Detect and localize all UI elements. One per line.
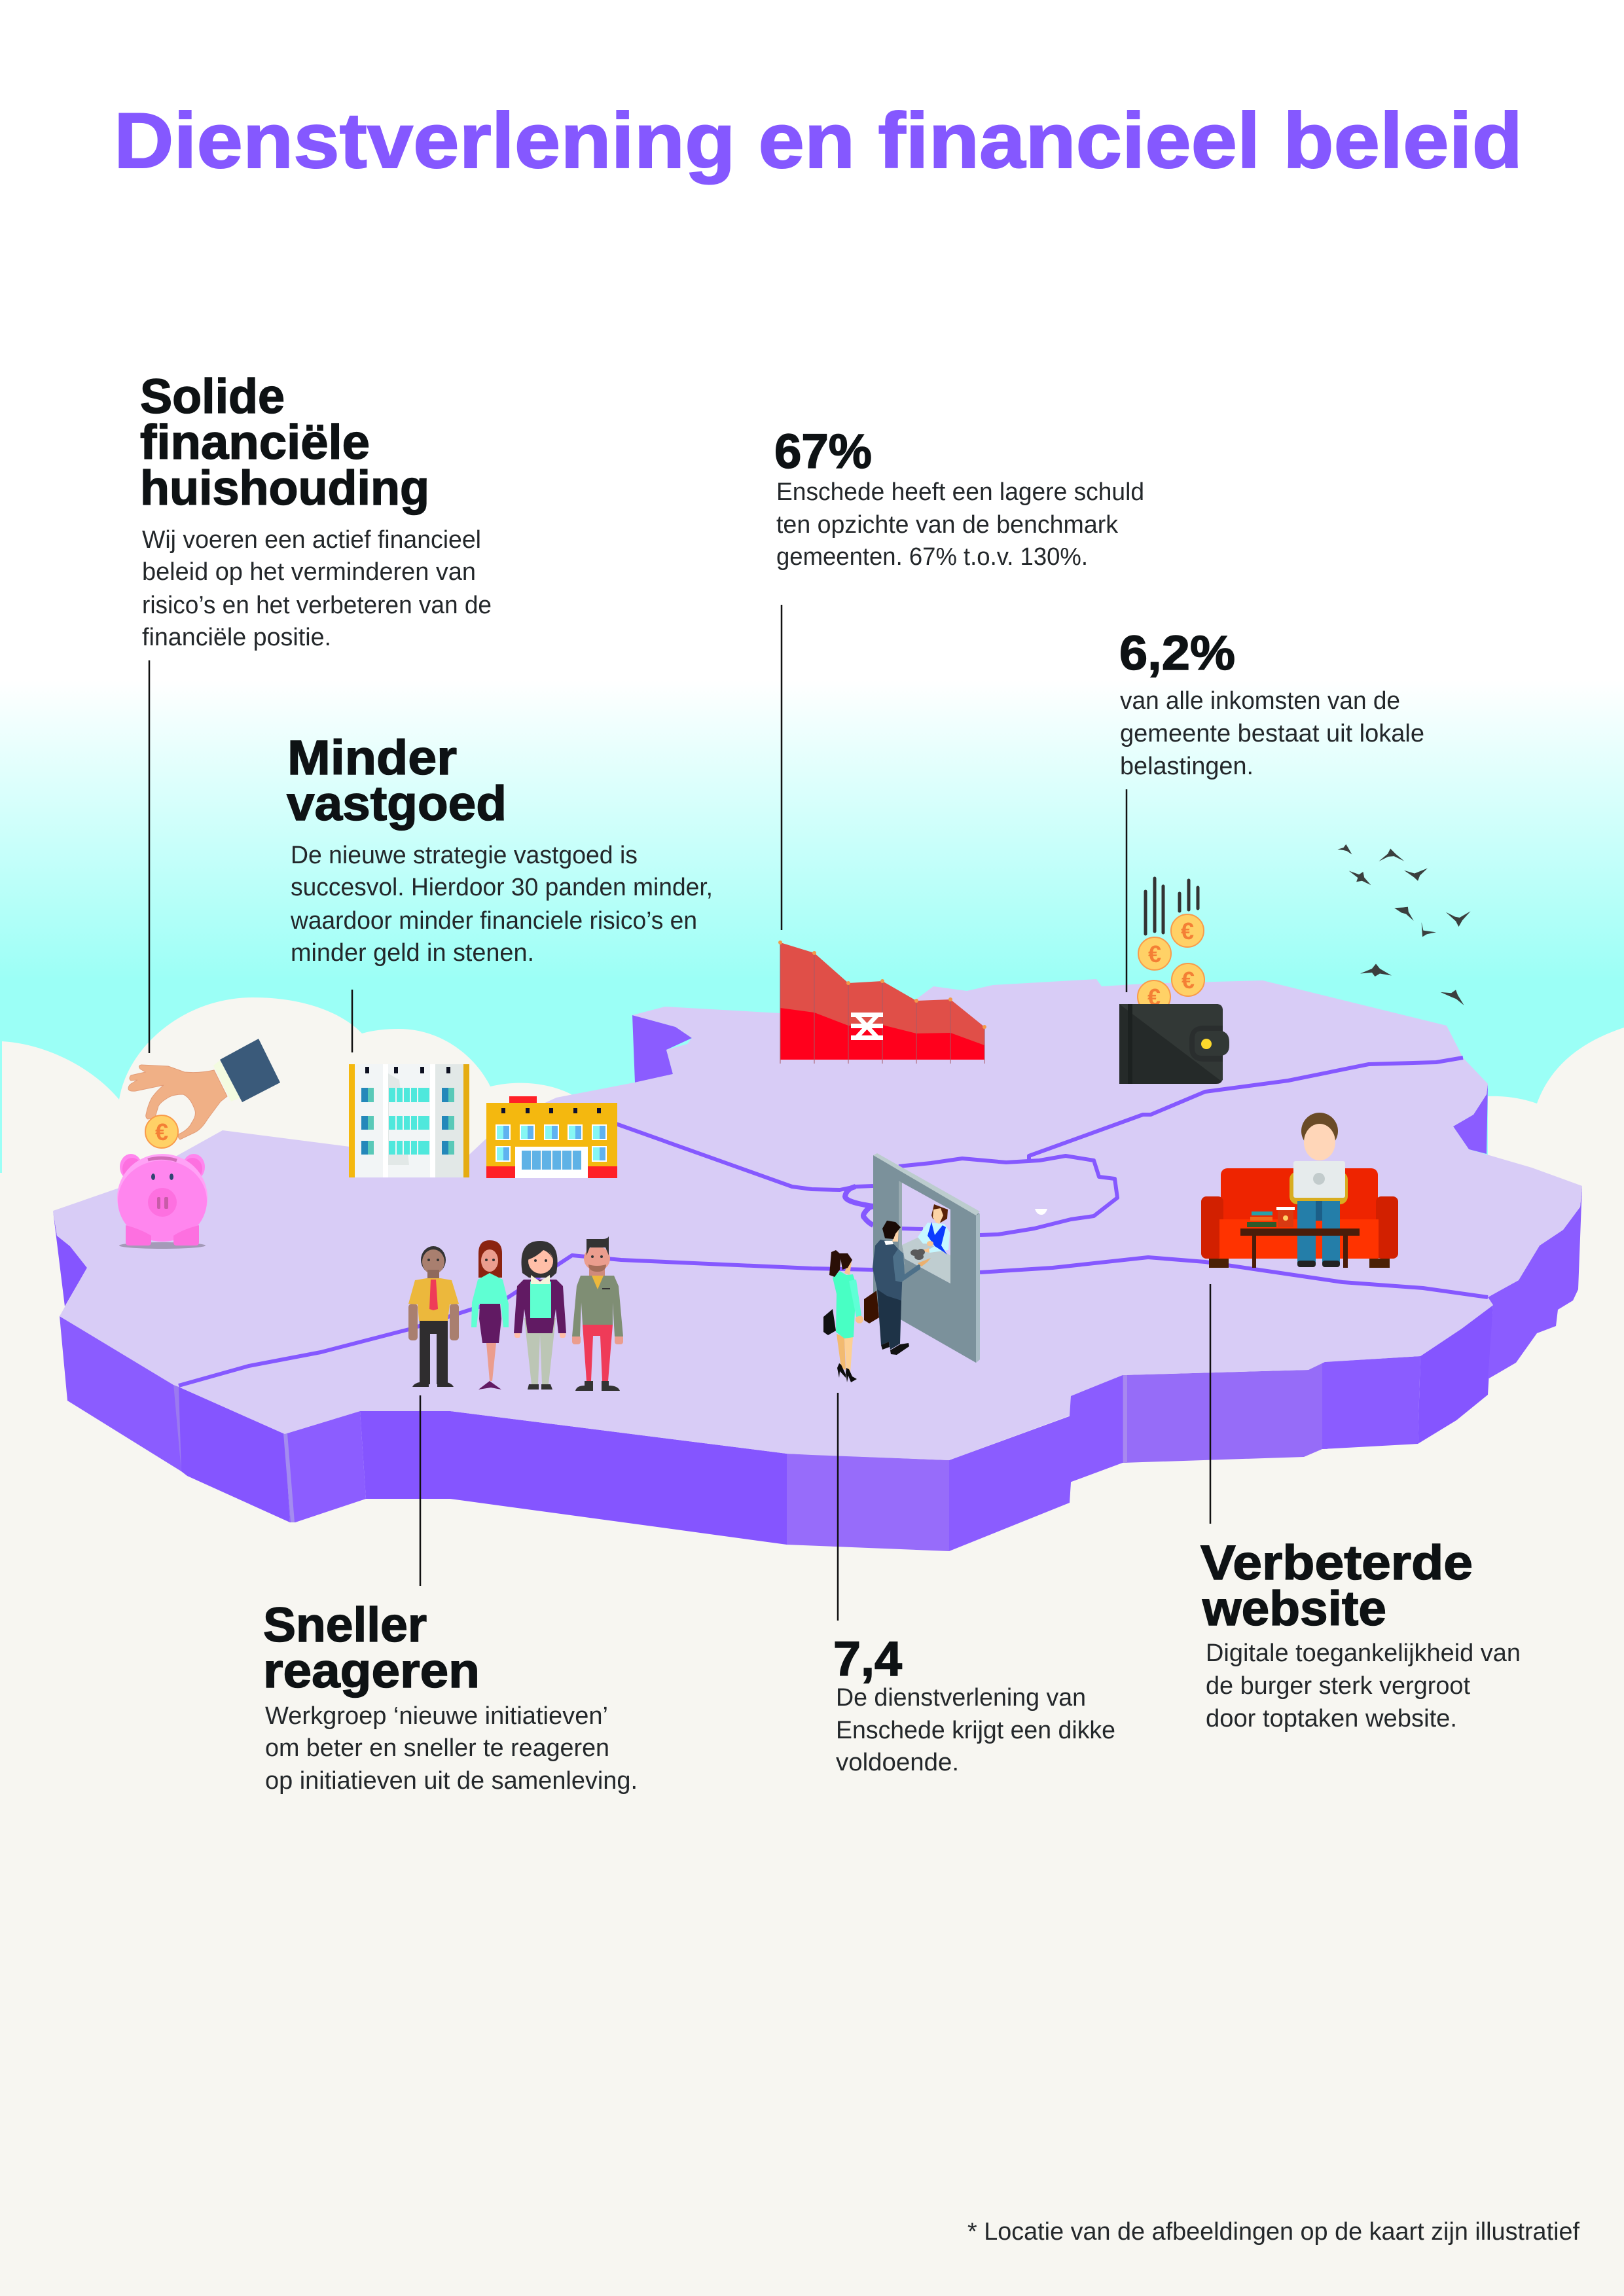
heading: Sneller <box>263 1598 427 1652</box>
heading <box>140 369 429 515</box>
body text <box>265 1702 638 1795</box>
body text: van alle inkomsten van de <box>1120 687 1400 715</box>
body text: financiële positie. <box>142 624 331 651</box>
heading <box>1200 1535 1473 1636</box>
block: 6,2% <box>1119 626 1424 780</box>
body text: gemeente bestaat uit lokale <box>1120 720 1424 747</box>
teller <box>911 1204 950 1260</box>
body text <box>776 478 1144 571</box>
man with briefcase <box>864 1221 931 1355</box>
body text: De dienstverlening van <box>836 1684 1086 1712</box>
area chart: debt <box>778 941 986 1064</box>
icon: person on red sofa with laptop <box>1201 1113 1398 1268</box>
body text <box>290 842 713 967</box>
body text: Wij voeren een actief financieel <box>142 526 481 554</box>
icon: tall white building <box>349 1064 469 1177</box>
number: 7,4 <box>833 1632 902 1686</box>
heading: huishouding <box>140 461 429 515</box>
body text: De nieuwe strategie vastgoed is <box>291 842 638 869</box>
leader line: sofa <box>1210 1284 1211 1524</box>
heading: website <box>1202 1581 1386 1636</box>
icon: hand with coin: € <box>155 1119 168 1145</box>
block: Solide financiële huishouding <box>140 369 492 651</box>
heading: Solide <box>140 369 285 423</box>
body text: risico’s en het verbeteren van de <box>142 592 492 619</box>
body text <box>1120 687 1424 780</box>
man with green sweater <box>572 1236 623 1391</box>
body text: succesvol. Hierdoor 30 panden minder, <box>291 874 713 901</box>
district borders <box>179 1058 1488 1386</box>
block: Sneller reageren <box>263 1598 638 1795</box>
number: 6,2% <box>1119 626 1235 680</box>
body text: om beter en sneller te reageren <box>265 1734 609 1762</box>
body text: minder geld in stenen. <box>291 939 534 967</box>
sky gradient <box>0 681 1624 1178</box>
heading: financiële <box>140 415 370 469</box>
map side walls <box>53 1015 1582 1551</box>
block: Minder vastgoed <box>287 730 713 967</box>
leader line: wallet <box>1126 789 1127 992</box>
leader line: piggy bank <box>149 660 150 1053</box>
map of Enschede <box>53 979 1582 1551</box>
leader line: buildings <box>352 990 353 1052</box>
icon: hand with coin <box>128 1039 280 1148</box>
icon: four residents <box>408 1236 623 1391</box>
heading: vastgoed <box>287 776 507 831</box>
counter wall <box>873 1153 980 1363</box>
icon: falling coins and wallet: € <box>1148 941 1161 967</box>
block: 7,4 <box>833 1632 1115 1776</box>
clouds <box>2 997 1624 1178</box>
body text <box>142 526 492 651</box>
title: Dienstverlening en financieel beleid <box>114 97 1523 185</box>
man with tie <box>408 1246 459 1387</box>
body text: waardoor minder financiele risico’s en <box>290 907 697 935</box>
heading: Verbeterde <box>1200 1535 1473 1590</box>
woman in skirt <box>471 1240 509 1390</box>
heading <box>263 1598 480 1698</box>
block: Verbeterde website <box>1200 1535 1521 1732</box>
body text: Digitale toegankelijkheid van <box>1206 1640 1521 1667</box>
body text: Enschede heeft een lagere schuld <box>776 478 1144 506</box>
body text: door toptaken website. <box>1206 1705 1457 1732</box>
body text: belastingen. <box>1120 753 1254 780</box>
body text: op initiatieven uit de samenleving. <box>265 1767 638 1795</box>
body text <box>836 1684 1115 1776</box>
body text <box>1206 1640 1521 1732</box>
heading: Minder <box>287 730 457 785</box>
icon: falling coins and wallet: € <box>1181 918 1194 944</box>
leader line: counter <box>837 1393 839 1621</box>
ground <box>0 1173 1624 2296</box>
body text: de burger sterk vergroot <box>1206 1672 1470 1700</box>
body text: Enschede krijgt een dikke <box>836 1717 1115 1744</box>
body text: voldoende. <box>836 1749 959 1776</box>
icon: flock of birds <box>1337 844 1471 1005</box>
leader line: residents <box>420 1395 421 1586</box>
heading: reageren <box>263 1643 480 1698</box>
woman with bag <box>823 1250 863 1382</box>
number: 67% <box>774 424 872 478</box>
block: 67% <box>774 424 1144 571</box>
body text: Werkgroep ‘nieuwe initiatieven’ <box>265 1702 608 1730</box>
icon: falling coins and wallet: € <box>1147 984 1161 1011</box>
woman in jacket <box>514 1241 566 1390</box>
body text: gemeenten. 67% t.o.v. 130%. <box>776 543 1088 571</box>
icon: falling coins and wallet: € <box>1182 967 1195 994</box>
icon: yellow building <box>486 1096 617 1178</box>
icon: service counter with people <box>823 1153 980 1382</box>
logo Enschede <box>851 1013 883 1040</box>
leader line: debt chart <box>781 605 782 930</box>
heading <box>287 730 507 831</box>
body text: beleid op het verminderen van <box>142 558 476 586</box>
icon: falling coins and wallet <box>1119 878 1229 1084</box>
body text: ten opzichte van de benchmark <box>776 511 1119 539</box>
map top surface <box>53 979 1582 1460</box>
footnote: * Locatie van de afbeeldingen op de kaart zijn illustratief <box>967 2218 1579 2246</box>
icon: piggy bank <box>117 1154 208 1249</box>
